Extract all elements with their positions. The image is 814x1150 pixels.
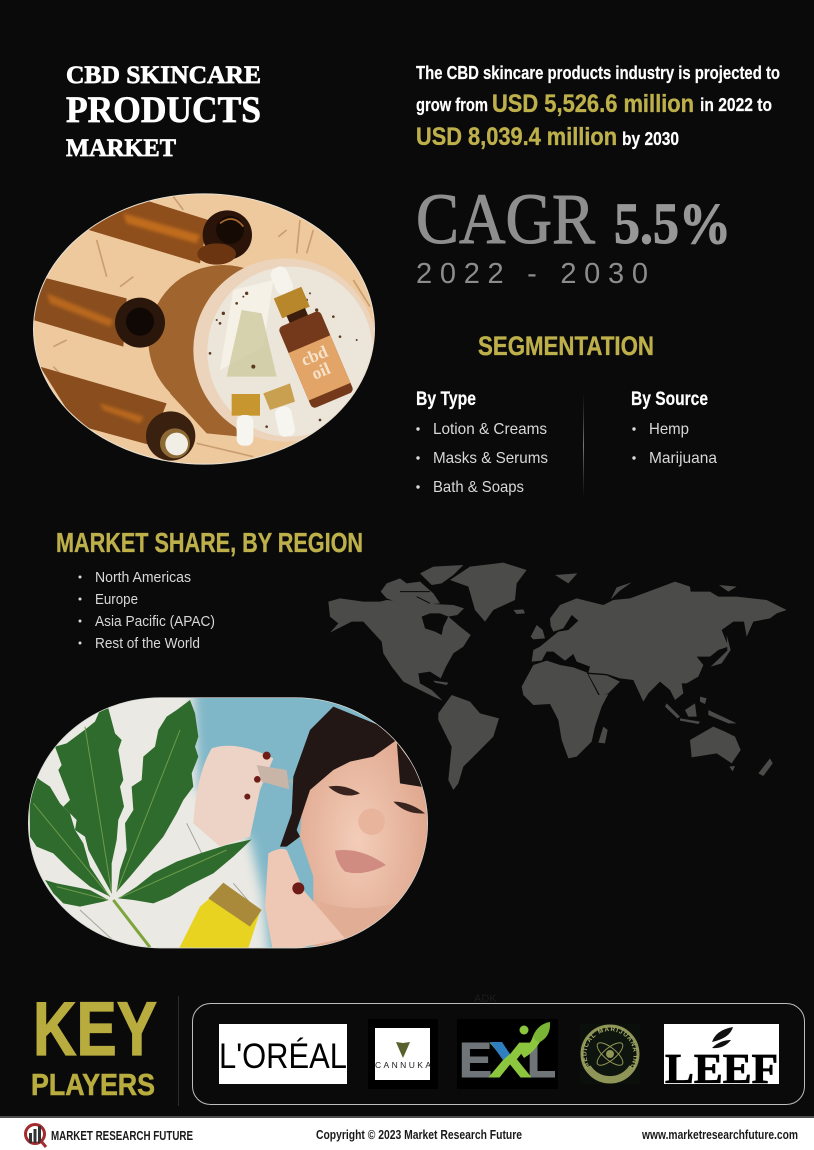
market size statement: grow from: [416, 95, 488, 115]
market size statement: in 2022 to: [700, 95, 772, 115]
CAGR callout: 2022 - 2030: [416, 258, 648, 290]
logo: Cannuka: CANNUKA: [375, 1060, 431, 1070]
segment list: by type: Lotion & Creams: [433, 421, 547, 438]
region list: Rest of the World: [95, 635, 200, 652]
title: MARKET: [66, 135, 176, 162]
footer: MARKET RESEARCH FUTURE: [51, 1128, 193, 1143]
region list: [78, 569, 215, 652]
segment list: by source: Hemp: [649, 421, 689, 438]
key players heading: PLAYERS: [31, 1067, 155, 1102]
logo: Cannuka: [368, 1019, 438, 1089]
footer: Copyright © 2023 Market Research Future: [316, 1127, 522, 1142]
segment list: by type: Masks & Serums: [433, 450, 548, 467]
market size statement: [416, 63, 780, 151]
CAGR callout: 5.5%: [614, 191, 731, 256]
photo: CBD oil bottles: cbd: [298, 342, 331, 370]
logo: EXL: [457, 1019, 558, 1089]
key players panel: [192, 1003, 805, 1105]
title: PRODUCTS: [66, 90, 261, 131]
region list: Europe: [95, 591, 138, 608]
key players heading: KEY: [33, 987, 157, 1072]
faint stray label: ADK: [474, 993, 497, 1005]
logo: Leef: [664, 1024, 779, 1093]
photo: cannabis leaf and woman applying oil: [28, 697, 428, 948]
segment list: by type: By Type: [416, 389, 476, 410]
footer: [0, 1116, 814, 1150]
logo: EXL: L: [527, 1034, 556, 1088]
CAGR callout: CAGR: [416, 179, 595, 259]
segment list: by source: By Source: [631, 389, 708, 410]
logo: Leef: LEEF: [665, 1047, 778, 1093]
region list: Asia Pacific (APAC): [95, 613, 215, 630]
heading: market share by region: MARKET SHARE, BY REGION: [56, 527, 363, 558]
title: CBD SKINCARE: [66, 62, 261, 89]
region list: North Americas: [95, 569, 191, 586]
logo: L'Oreal: [219, 1024, 347, 1084]
world map: [328, 563, 787, 790]
photo: CBD oil bottles: [33, 193, 375, 465]
segment list: by source: Marijuana: [649, 450, 717, 467]
logo: EXL: X: [489, 1034, 531, 1088]
key players heading: [31, 987, 157, 1102]
heading: segmentation: SEGMENTATION: [478, 331, 654, 361]
market size statement: USD 8,039.4 million: [416, 123, 617, 151]
logo: L'Oreal: L'ORÉAL: [219, 1037, 347, 1076]
segment list: by source: [631, 389, 717, 467]
market size statement: by 2030: [622, 129, 679, 149]
title: [66, 62, 261, 162]
segment list: by type: Bath & Soaps: [433, 479, 524, 496]
segment list: by type: [416, 389, 548, 496]
market size statement: USD 5,526.6 million: [492, 90, 694, 118]
photo: CBD oil bottles: oil: [309, 359, 333, 384]
CAGR callout: [416, 179, 731, 290]
logo: EXL: E: [459, 1034, 492, 1088]
icon: market research future logo: [26, 1124, 46, 1147]
logo: Medical Marijuana Inc: MEDICAL MARIJUANA INC: [582, 1026, 638, 1069]
